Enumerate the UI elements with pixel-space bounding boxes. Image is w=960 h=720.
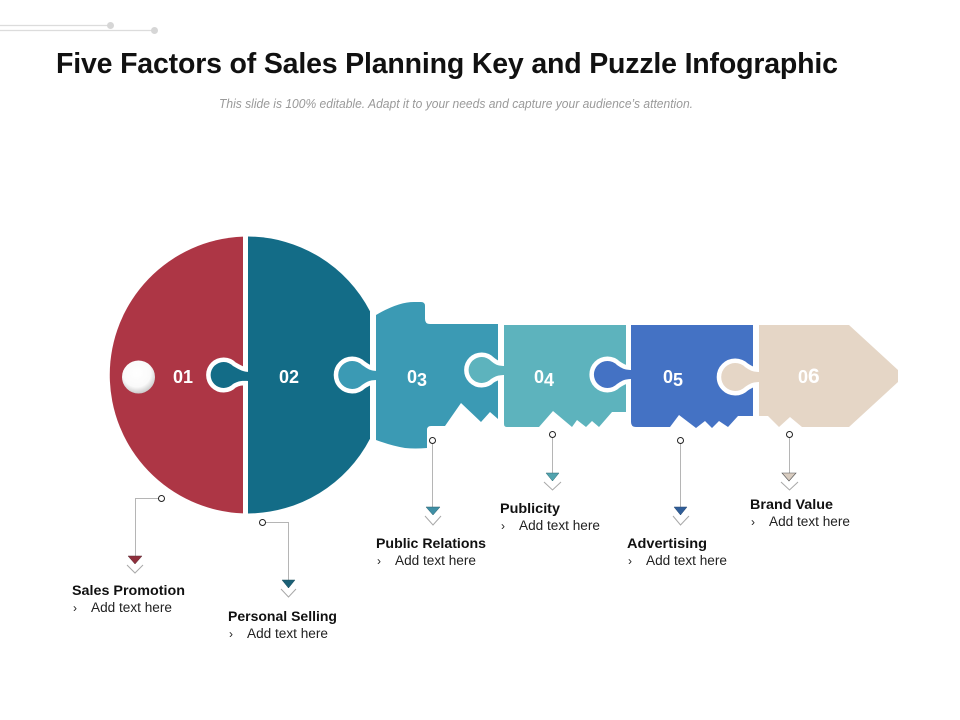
number 04: 4	[544, 370, 554, 390]
number 05: 0	[663, 367, 673, 387]
callout: publicity: Add text here	[519, 518, 600, 533]
piece 02: dark teal half circle	[248, 236, 370, 514]
callout: sales promotion: Add text here	[91, 600, 172, 615]
knob of piece 03	[338, 361, 378, 389]
callout: advertising	[627, 438, 727, 568]
piece 01: red half circle	[110, 237, 243, 513]
callout: brand value: Brand Value	[750, 496, 833, 512]
callout: brand value: ›	[751, 515, 755, 529]
knob of piece 02	[211, 362, 250, 388]
number 03: 3	[417, 370, 427, 390]
callout: personal selling: Personal Selling	[228, 608, 337, 624]
number 04: 0	[534, 367, 544, 387]
callout: publicity: ›	[501, 519, 505, 533]
callout: sales promotion	[72, 496, 185, 615]
decorative corner lines	[0, 22, 158, 34]
callout: publicity	[500, 432, 600, 533]
callout: brand value	[750, 432, 850, 529]
callout: public relations: Public Relations	[376, 535, 486, 551]
keyhole ball	[122, 360, 155, 394]
knob of piece 06	[721, 363, 761, 391]
number 06: 06	[798, 365, 820, 388]
number 03: 0	[407, 367, 417, 387]
knob of piece 05	[594, 361, 633, 388]
callout: advertising: Add text here	[646, 553, 727, 568]
number 01: 01	[173, 367, 193, 387]
callout: personal selling: Add text here	[247, 626, 328, 641]
callout: advertising: Advertising	[627, 535, 707, 551]
callout: publicity: Publicity	[500, 500, 560, 516]
callout: brand value: Add text here	[769, 514, 850, 529]
piece 05	[631, 325, 753, 428]
piece 04	[504, 325, 626, 427]
number 02: 02	[279, 367, 299, 387]
piece 03: key collar	[376, 302, 498, 448]
callout: advertising: ›	[628, 554, 632, 568]
step numbers	[173, 365, 820, 390]
piece 06: arrow tip	[759, 325, 898, 427]
callout: sales promotion: ›	[73, 601, 77, 615]
callout: sales promotion: Sales Promotion	[72, 582, 185, 598]
callout: public relations: ›	[377, 554, 381, 568]
knob of piece 04	[469, 357, 506, 383]
callout: personal selling: ›	[229, 627, 233, 641]
title: Five Factors of Sales Planning Key and Puzzle Infographic	[56, 48, 838, 80]
callout: public relations	[376, 438, 486, 568]
number 05: 5	[673, 370, 683, 390]
callout: public relations: Add text here	[395, 553, 476, 568]
key and puzzle graphic	[110, 236, 898, 514]
subtitle: This slide is 100% editable. Adapt it to your needs and capture your audience’s attention.	[219, 96, 693, 111]
callout: personal selling	[228, 520, 337, 641]
